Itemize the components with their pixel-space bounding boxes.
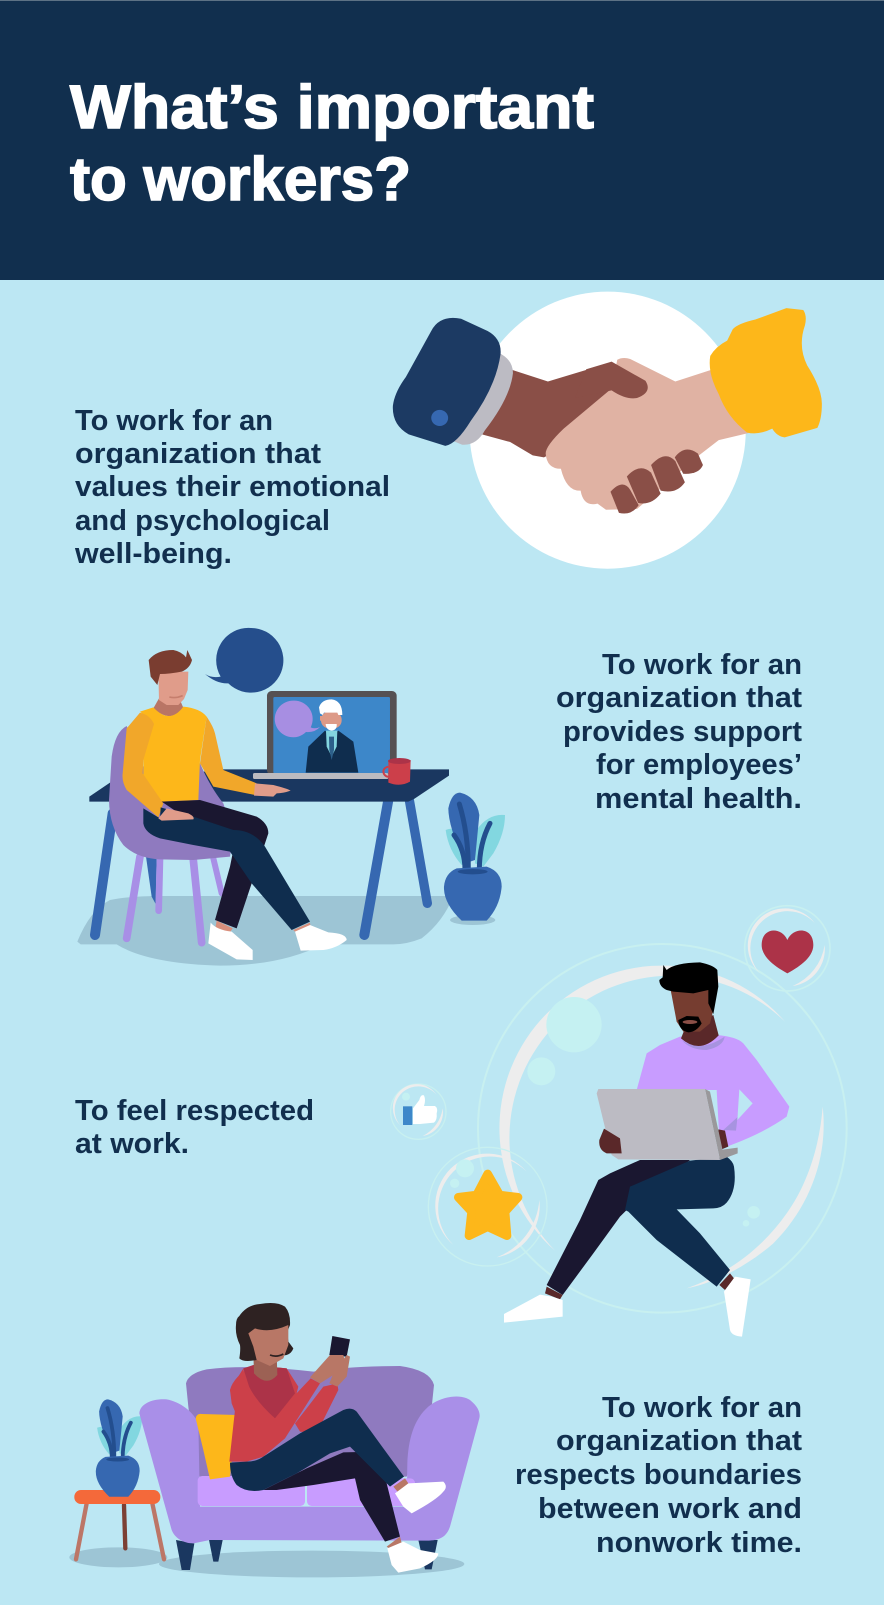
left hand <box>599 1129 622 1153</box>
sofa arms and base <box>139 1397 480 1543</box>
ankles <box>215 921 311 934</box>
dark back leg <box>162 800 268 928</box>
neck <box>253 1353 277 1381</box>
illustration: man on video call at desk <box>77 628 505 966</box>
text block: boundaries between work and nonwork time: respects boundaries <box>515 1459 802 1491</box>
cufflink <box>431 410 448 426</box>
beard <box>678 1016 702 1032</box>
sofa shadow <box>159 1551 464 1577</box>
table top <box>89 769 449 802</box>
text block: support for mental health: mental health. <box>595 783 802 815</box>
yellow sweater torso <box>140 707 207 802</box>
text block: emotional and psychological well-being: values their emotional <box>75 471 390 503</box>
dark back leg <box>547 1160 690 1295</box>
text block: emotional and psychological well-being: and psychological <box>75 505 330 537</box>
text block: boundaries between work and nonwork time: organization that <box>556 1425 802 1457</box>
grey shirt cuff <box>451 353 513 445</box>
left sleeve <box>122 713 163 817</box>
sofa back <box>186 1366 434 1477</box>
white shoes <box>387 1482 446 1573</box>
mouth <box>683 1020 697 1024</box>
speech bubble <box>205 628 283 693</box>
text block: emotional and psychological well-being <box>74 405 390 570</box>
yellow sleeve <box>710 308 822 437</box>
brown fingers <box>610 450 703 513</box>
text block: boundaries between work and nonwork time: To work for an <box>602 1392 802 1424</box>
sweater shading <box>682 1037 753 1131</box>
icon: star bubble <box>428 1147 547 1266</box>
face <box>248 1325 288 1366</box>
illustration: handshake <box>393 292 822 569</box>
neck <box>153 697 184 716</box>
navy jacket sleeve <box>393 318 501 446</box>
grey crescent upper left <box>499 966 785 1251</box>
potted plant <box>444 793 505 925</box>
navy front leg <box>230 1409 404 1491</box>
text block: emotional and psychological well-being: organization that <box>75 438 321 470</box>
dark back leg <box>263 1452 400 1542</box>
white circle <box>470 292 746 569</box>
text block: support for mental health: for employees’ <box>596 749 802 781</box>
text block: feel respected: To feel respected <box>75 1095 314 1127</box>
phone <box>329 1336 350 1357</box>
text block: support for mental health: organization that <box>556 682 802 714</box>
small potted plant <box>96 1399 142 1497</box>
light hand <box>546 358 751 510</box>
large thin ring <box>478 944 847 1313</box>
title: to workers? <box>70 145 411 213</box>
white shoes <box>208 923 347 960</box>
chair seat and back <box>109 726 233 860</box>
pale bubbles <box>527 997 760 1227</box>
ankles <box>545 1273 734 1299</box>
right hand behind laptop <box>718 1129 728 1150</box>
text block: support for mental health <box>556 649 802 815</box>
text block: emotional and psychological well-being: well-being. <box>74 538 232 570</box>
red mug <box>383 758 411 785</box>
side table <box>74 1490 164 1559</box>
hair <box>659 962 718 1014</box>
on-screen speech bubble <box>275 701 320 737</box>
illustration: woman on sofa with phone <box>69 1303 480 1577</box>
yellow pillow <box>196 1414 237 1479</box>
title: What’s important <box>70 73 594 141</box>
hands <box>310 1355 350 1387</box>
background gap under arm <box>737 1089 753 1120</box>
text block: support for mental health: provides support <box>563 716 802 748</box>
neck <box>681 1015 719 1046</box>
hair back <box>236 1303 293 1361</box>
ankles <box>387 1478 408 1552</box>
brown arm <box>482 367 614 457</box>
text block: support for mental health: To work for an <box>602 649 802 681</box>
sweater chest shading <box>243 1365 295 1418</box>
mouth <box>270 1354 283 1356</box>
floor shadow <box>77 896 453 966</box>
seat cushions <box>198 1476 415 1506</box>
red sweater torso <box>229 1365 298 1462</box>
right sleeve <box>200 717 257 795</box>
on-screen colleague <box>306 699 358 773</box>
white shoes <box>504 1277 751 1337</box>
grey crescent lower right <box>687 1107 824 1288</box>
chair legs <box>127 857 222 943</box>
text block: boundaries between work and nonwork time <box>515 1392 802 1559</box>
face <box>158 672 188 705</box>
text block: feel respected: at work. <box>75 1128 189 1160</box>
title <box>70 73 594 213</box>
lilac sweater <box>637 1035 789 1150</box>
table shadow <box>69 1547 167 1567</box>
header banner <box>0 0 884 280</box>
laptop <box>597 1089 738 1160</box>
hands <box>158 783 291 821</box>
illustration: man with laptop and feedback icons <box>391 906 847 1337</box>
navy front leg <box>625 1157 735 1287</box>
navy front leg <box>143 807 310 930</box>
text block: boundaries between work and nonwork time: nonwork time. <box>596 1527 802 1559</box>
text block: boundaries between work and nonwork time: between work and <box>538 1493 802 1525</box>
mouth <box>169 696 183 698</box>
back table leg and front table legs <box>95 800 427 935</box>
icon: heart bubble <box>745 906 830 991</box>
face <box>671 987 717 1032</box>
text block: emotional and psychological well-being: To work for an <box>75 405 273 437</box>
back chair leg <box>146 857 157 904</box>
icon: thumbs up bubble <box>391 1084 446 1139</box>
laptop <box>253 691 397 779</box>
front arm <box>230 1368 320 1438</box>
sofa legs <box>176 1540 438 1570</box>
text block: feel respected <box>75 1095 314 1160</box>
second forearm <box>295 1383 338 1433</box>
brown thumb <box>575 362 648 398</box>
hair <box>149 650 192 685</box>
